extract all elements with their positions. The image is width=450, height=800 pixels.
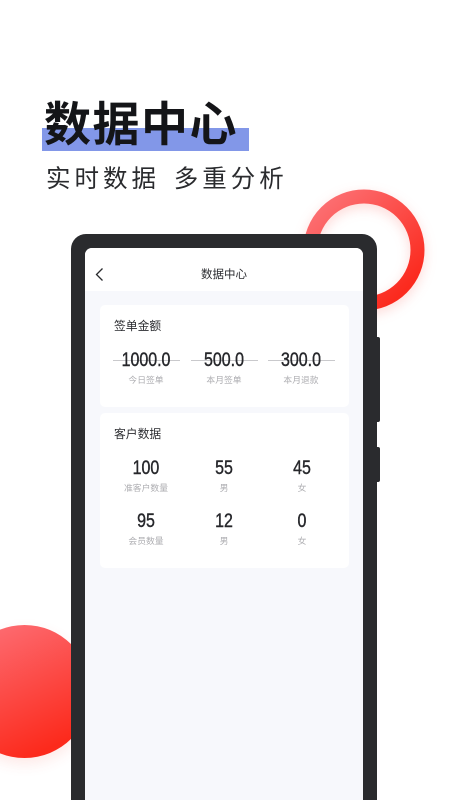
decorative red circle <box>0 625 91 758</box>
metric: today value: 1000.0 <box>122 350 170 371</box>
heading: signing amount: 签单金额 <box>114 319 161 333</box>
metric: members male value: 12 <box>215 511 233 532</box>
metric: members value: 95 <box>137 511 155 532</box>
metric: members female label: 女 <box>298 536 306 546</box>
icon: back arrow <box>96 268 103 281</box>
metric: prospects label: 准客户数量 <box>124 483 168 493</box>
title highlight bar <box>42 128 249 151</box>
decorative red ring <box>302 189 429 318</box>
metric: prospects female label: 女 <box>298 483 306 493</box>
metric: refund label: 本月退款 <box>283 375 319 385</box>
subtitle: 实时数据 多重分析 <box>46 166 288 193</box>
phone side button lower <box>372 447 380 482</box>
metric: members female value: 0 <box>298 511 306 532</box>
panel: signing amount <box>100 305 349 407</box>
title: 数据中心 <box>44 98 238 151</box>
metric: prospects male label: 男 <box>220 483 228 493</box>
screen title: 数据中心 <box>201 269 247 281</box>
metric: members male label: 男 <box>220 536 228 546</box>
phone frame <box>71 234 377 800</box>
metric: prospects male value: 55 <box>215 458 233 479</box>
metric: members label: 会员数量 <box>128 536 164 546</box>
app header <box>85 248 363 291</box>
phone screen <box>85 248 363 800</box>
metric: month label: 本月签单 <box>206 375 242 385</box>
divider lines <box>113 360 180 361</box>
phone side button upper <box>372 337 380 422</box>
metric: prospects value: 100 <box>133 458 159 479</box>
panel: customer data <box>100 413 349 568</box>
metric: today label: 今日签单 <box>128 375 164 385</box>
metric: refund value: 300.0 <box>281 350 321 371</box>
heading: customer data: 客户数据 <box>114 427 161 441</box>
metric: month value: 500.0 <box>204 350 244 371</box>
metric: prospects female value: 45 <box>293 458 311 479</box>
